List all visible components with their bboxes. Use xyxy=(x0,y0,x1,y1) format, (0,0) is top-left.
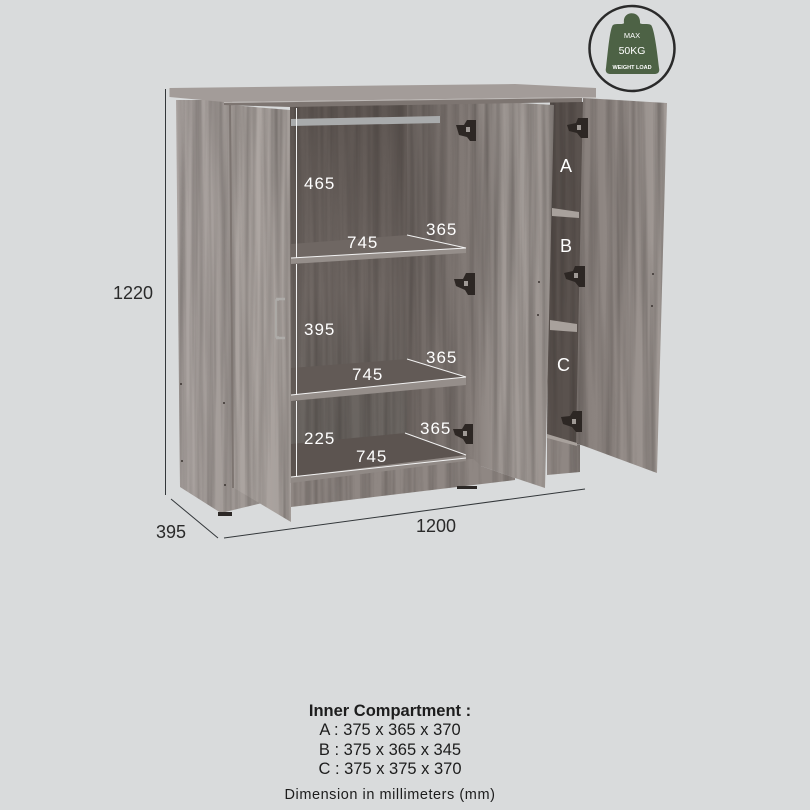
interior measurements: 395 xyxy=(304,320,335,339)
weight icon xyxy=(606,13,659,74)
compartment letters: B xyxy=(560,236,572,256)
door handle xyxy=(276,299,285,338)
hinges xyxy=(453,118,588,444)
shelf 3 xyxy=(291,433,466,483)
weight load badge xyxy=(590,6,674,91)
wood grain overlay xyxy=(165,80,670,525)
interior measurements xyxy=(304,174,457,466)
assembly holes xyxy=(180,273,654,486)
badge text: 50KG xyxy=(619,45,645,57)
cabinet illustration with dimensions xyxy=(114,4,676,538)
interior right wall xyxy=(407,103,474,472)
overall dimension labels: 1220 xyxy=(113,283,153,303)
top panel xyxy=(170,84,596,107)
compartment letters: A xyxy=(560,156,572,176)
interior measurements: 745 xyxy=(347,233,378,252)
badge text xyxy=(612,31,652,71)
badge text: MAX xyxy=(624,31,640,40)
inner compartment caption xyxy=(285,702,495,803)
interior measurements: 365 xyxy=(420,419,451,438)
shelf 1 xyxy=(291,235,466,264)
clothes rail xyxy=(291,116,440,126)
compartment B size: B : 375 x 365 x 345 xyxy=(319,741,461,759)
compartment A size: A : 375 x 365 x 370 xyxy=(319,721,461,739)
overall dimension labels xyxy=(113,283,456,542)
narrow compartment plinth xyxy=(547,436,580,475)
overall dimension lines xyxy=(166,89,585,538)
interior measurements: 465 xyxy=(304,174,335,193)
interior measurements: 365 xyxy=(426,348,457,367)
side panel shadow strip xyxy=(229,103,234,488)
badge text: WEIGHT LOAD xyxy=(612,65,652,71)
hinge shapes xyxy=(453,118,588,444)
cabinet xyxy=(165,80,670,525)
interior measurements: 365 xyxy=(426,220,457,239)
units note: Dimension in millimeters (mm) xyxy=(285,787,495,803)
feet xyxy=(218,486,477,516)
compartment letters: C xyxy=(557,355,570,375)
overall dimension labels: 1200 xyxy=(416,516,456,536)
shelf 2 xyxy=(291,359,466,401)
caption heading: Inner Compartment : xyxy=(309,702,471,720)
interior measurements: 745 xyxy=(352,365,383,384)
interior back wall xyxy=(290,103,410,483)
left door xyxy=(231,105,291,522)
narrow compartment interior xyxy=(547,102,585,446)
badge ring xyxy=(590,6,674,91)
right door xyxy=(576,98,667,473)
middle door xyxy=(470,100,554,488)
interior dimension lines xyxy=(291,108,466,477)
compartment letters xyxy=(557,156,572,375)
interior measurements: 745 xyxy=(356,447,387,466)
cabinet left side panel xyxy=(176,100,262,513)
overall dimension labels: 395 xyxy=(156,522,186,542)
narrow compartment shelves xyxy=(547,208,579,446)
hinge screws xyxy=(463,125,581,436)
plinth xyxy=(291,458,515,507)
compartment C size: C : 375 x 375 x 370 xyxy=(318,760,462,778)
interior measurements: 225 xyxy=(304,429,335,448)
